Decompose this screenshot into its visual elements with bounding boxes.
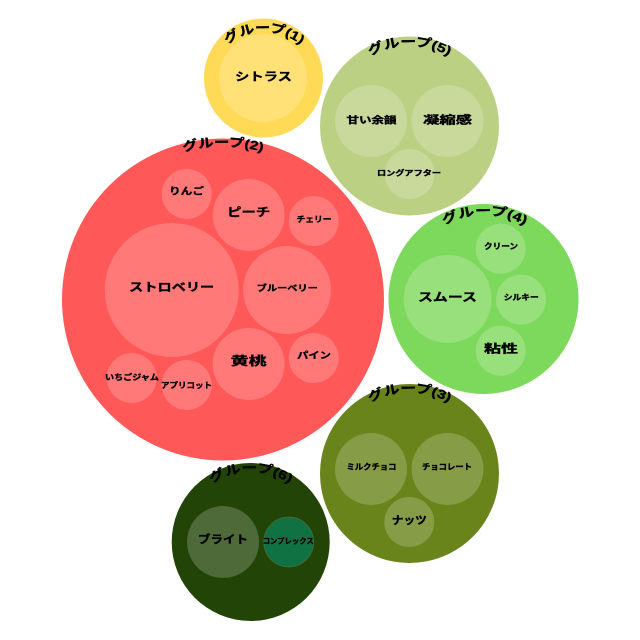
bubble: silky bbox=[496, 275, 546, 325]
bubble: viscous bbox=[476, 326, 526, 376]
bubble: nuts: ナッツ bbox=[392, 514, 427, 527]
bubble: blueberry: ブルーベリー bbox=[257, 283, 318, 293]
bubble: strawberry jam: いちごジャム bbox=[105, 372, 159, 382]
group 6 bbox=[172, 463, 330, 621]
bubble: milk chocolate bbox=[335, 433, 407, 505]
bubble: pine bbox=[289, 333, 339, 383]
bubble: complex: コンプレックス bbox=[263, 536, 314, 546]
group 5 bbox=[320, 36, 499, 216]
bubble: cherry: チェリー bbox=[296, 215, 332, 224]
bubble: concentration: 凝縮感 bbox=[423, 112, 472, 126]
bubble: sweet aftertaste: 甘い余韻 bbox=[346, 114, 397, 126]
bubble: apple bbox=[162, 169, 212, 219]
bubble: apricot: アプリコット bbox=[161, 381, 212, 390]
bubble: clean: クリーン bbox=[484, 241, 518, 251]
bubble: citrus: シトラス bbox=[235, 70, 292, 84]
group 2 label: グループ(2) bbox=[182, 136, 263, 154]
bubble: peach: ピーチ bbox=[227, 206, 270, 219]
bubble: milk chocolate: ミルクチョコ bbox=[346, 462, 396, 472]
bubble: concentration bbox=[412, 85, 484, 157]
group 3 bbox=[320, 383, 499, 563]
bubble: long aftertaste bbox=[377, 149, 441, 199]
bubble: pine: パイン bbox=[297, 350, 331, 360]
bubble: sweet aftertaste bbox=[335, 85, 407, 157]
bubble: complex bbox=[263, 517, 314, 567]
bubble: yellow peach bbox=[213, 328, 285, 400]
bubble: strawberry bbox=[105, 223, 239, 357]
group 2 bbox=[62, 136, 384, 460]
bubble: apricot bbox=[161, 360, 212, 410]
group 3 label: グループ(3) bbox=[368, 383, 451, 404]
group 1 label: グループ(1) bbox=[224, 23, 304, 46]
group 5 label: グループ(5) bbox=[368, 36, 451, 57]
bubble: chocolate: チョコレート bbox=[422, 463, 472, 472]
bubble: blueberry bbox=[243, 246, 331, 334]
bubble: yellow peach: 黄桃 bbox=[231, 353, 267, 368]
group 4 label: グループ(4) bbox=[442, 206, 527, 226]
bubble: peach bbox=[213, 179, 285, 251]
bubble: cherry bbox=[289, 196, 339, 246]
group 4 bbox=[388, 204, 578, 394]
bubble: bright: ブライト bbox=[198, 532, 248, 546]
bubble: strawberry jam bbox=[105, 353, 159, 403]
group 6 label: グループ(6) bbox=[210, 463, 292, 484]
bubble: viscous: 粘性 bbox=[484, 341, 519, 355]
bubble: nuts bbox=[384, 497, 434, 547]
bubble: apple: りんご bbox=[169, 186, 205, 198]
bubble: smooth: スムース bbox=[418, 291, 477, 304]
bubble: silky: シルキー bbox=[504, 293, 539, 302]
bubble: chocolate bbox=[412, 433, 484, 505]
bubble: long aftertaste: ロングアフター bbox=[377, 167, 441, 177]
bubble: clean bbox=[476, 224, 526, 274]
bubble: strawberry: ストロベリー bbox=[129, 282, 214, 294]
bubble: bright bbox=[187, 506, 259, 578]
group 1 bbox=[204, 18, 323, 138]
bubble: smooth bbox=[404, 255, 492, 343]
